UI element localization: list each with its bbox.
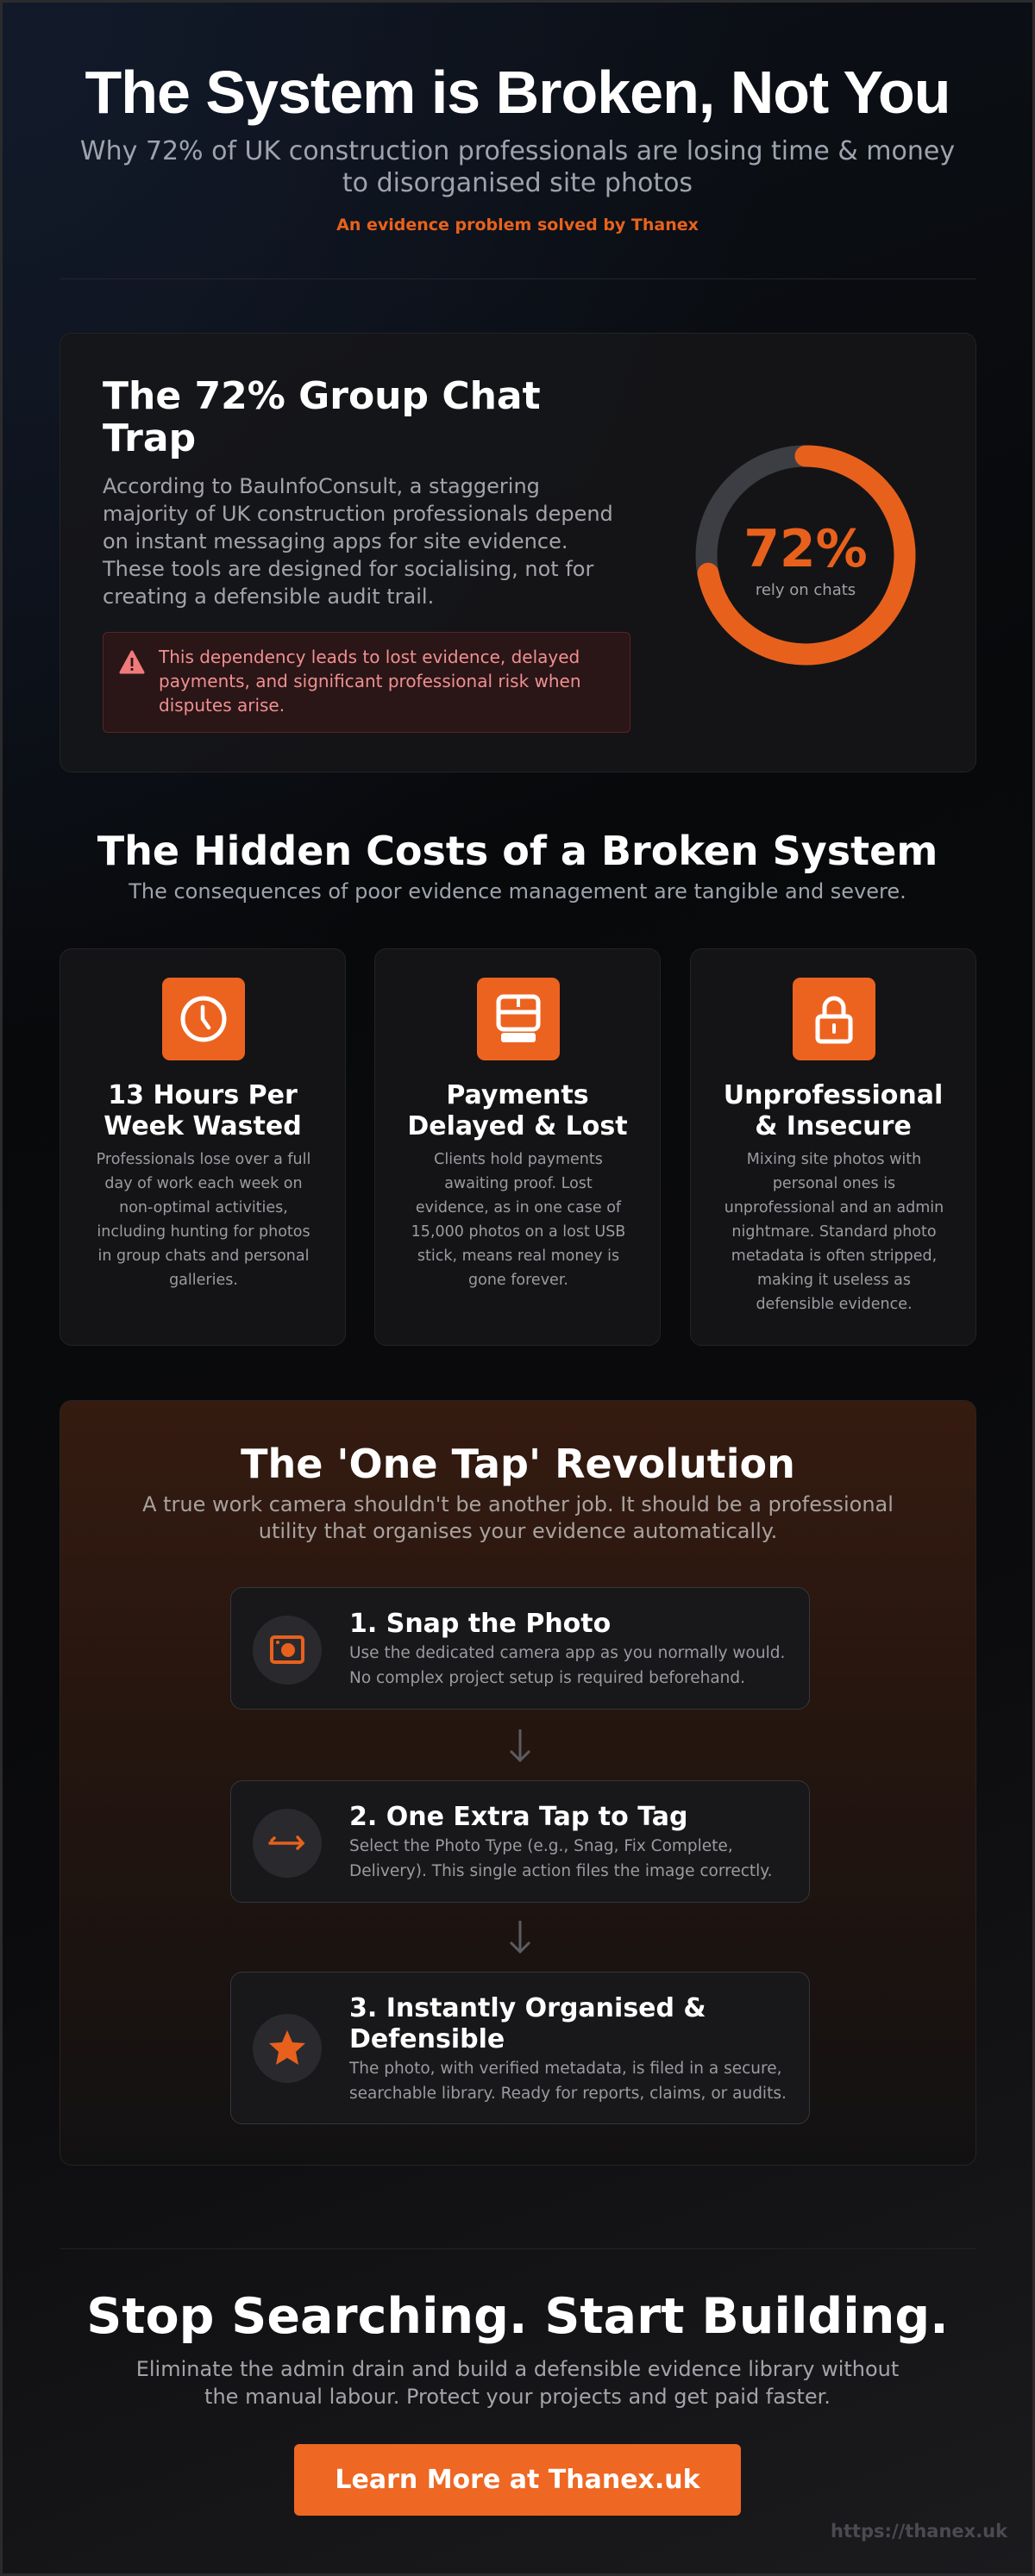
arrow (510, 1729, 530, 1762)
panel: unprofessional and insecure: Unprofessional (724, 1080, 943, 1110)
title: The System is Broken, Not You (85, 59, 950, 126)
icon: payment terminal (477, 978, 560, 1060)
panel: payments delayed: Clients hold payments awaiting proof. Lost evidence, as in one case of 15,000 photos on a lost USB stick, means real money is gone forever. (411, 1151, 625, 1289)
step 3: Defensible (349, 2024, 505, 2054)
subtitle: Why 72% of UK construction professionals are losing time & money to disorganised site photos (80, 136, 955, 198)
subtitle: one tap: A true work camera shouldn't be another job. It should be a professional utility that organises your evidence automatically. (142, 1492, 894, 1543)
arrow (510, 1921, 530, 1954)
panel: unprofessional and insecure: Mixing site photos with personal ones is unprofessional and an admin nightmare. Standard photo metadata is often stripped, making it useless as defensible evidence. (724, 1151, 944, 1313)
step 2: Select the Photo Type (e.g., Snag, Fix Complete, Delivery). This single action files the image correctly. (349, 1837, 772, 1880)
step 2 (230, 1780, 810, 1903)
step 3 (230, 1972, 810, 2124)
step 3: The photo, with verified metadata, is filed in a secure, searchable library. Ready for reports, claims, or audits. (349, 2060, 787, 2103)
panel: payments delayed: Delayed & Lost (407, 1111, 628, 1141)
step 1 (230, 1587, 810, 1710)
text block: explanation: According to BauInfoConsult, a staggering majority of UK construction professionals depend on instant messaging apps for site evidence. These tools are designed for socialising, not for creating a defensible audit trail. (103, 474, 613, 609)
panel: payments delayed (374, 948, 661, 1346)
button: learn more: Learn More at Thanex.uk (335, 2465, 700, 2495)
icon: star (253, 2014, 322, 2083)
footer url: https://thanex.uk (831, 2521, 1007, 2542)
icon: padlock (793, 978, 875, 1060)
tagline: An evidence problem solved by Thanex (336, 216, 699, 234)
icon: tag tap (253, 1809, 322, 1878)
callout: risk warning: This dependency leads to lost evidence, delayed payments, and significant professional risk when disputes arise. (159, 647, 581, 716)
step 3: 3. Instantly Organised & (349, 1993, 706, 2023)
heading: one tap revolution: The 'One Tap' Revolution (241, 1441, 795, 1487)
callout: risk warning (103, 632, 630, 733)
panel: 13 hours wasted (60, 948, 346, 1346)
panel: unprofessional and insecure: & Insecure (755, 1111, 912, 1141)
icon: warning (119, 650, 145, 674)
panel: 13 hours wasted: Professionals lose over a full day of work each week on non-optimal activities, including hunting for photos in group chats and personal galleries. (97, 1151, 310, 1289)
panel: 13 hours wasted: 13 Hours Per (108, 1080, 298, 1110)
panel: 13 hours wasted: Week Wasted (104, 1111, 302, 1141)
panel: payments delayed: Payments (446, 1080, 589, 1110)
heading: call to action: Stop Searching. Start Building. (86, 2288, 949, 2345)
step 2: 2. One Extra Tap to Tag (349, 1802, 688, 1832)
step 1: Use the dedicated camera app as you normally would. No complex project setup is required beforehand. (349, 1644, 785, 1687)
text block: call to action: Eliminate the admin drain and build a defensible evidence library without the manual labour. Protect your projects and get paid faster. (136, 2357, 899, 2409)
step 1: 1. Snap the Photo (349, 1609, 611, 1639)
subtitle: hidden costs: The consequences of poor evidence management are tangible and severe. (129, 879, 906, 903)
button: learn more (294, 2444, 741, 2516)
chart: 72% donut: 72% (743, 519, 868, 579)
panel: unprofessional and insecure (690, 948, 976, 1346)
icon: camera (253, 1616, 322, 1685)
heading: 72% group chat trap: The 72% Group Chat Trap (103, 374, 541, 460)
panel: one tap revolution (60, 1400, 976, 2166)
panel: group chat trap (60, 333, 976, 772)
icon: clock (162, 978, 245, 1060)
heading: hidden costs: The Hidden Costs of a Broken System (97, 828, 938, 874)
chart: 72% donut: rely on chats (756, 581, 856, 599)
chart: 72% donut (695, 445, 916, 666)
